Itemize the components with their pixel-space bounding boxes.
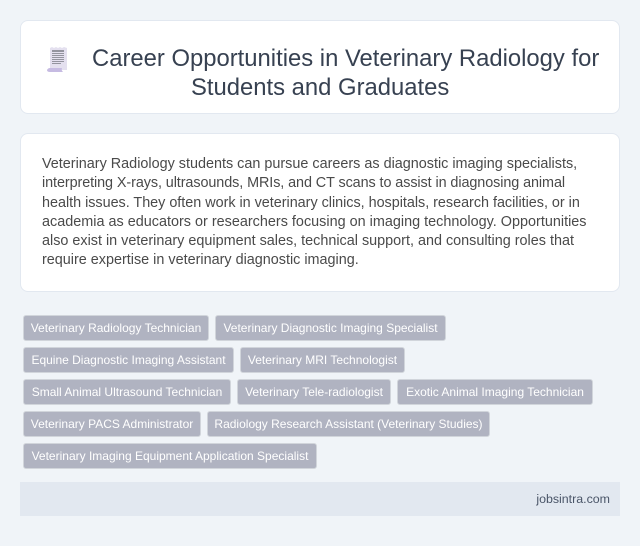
panel: description — [20, 133, 620, 292]
description text: academia as educators or researchers focusing on imaging technology. Opportunities — [42, 214, 587, 230]
tag: Veterinary Tele-radiologist — [245, 385, 383, 399]
tag: Equine Diagnostic Imaging Assistant — [31, 353, 226, 367]
tag list — [23, 315, 593, 469]
description text: require expertise in veterinary diagnostic imaging. — [42, 252, 359, 268]
tag: Exotic Animal Imaging Technician — [406, 385, 584, 399]
tag: Veterinary MRI Technologist — [248, 353, 397, 367]
description text: interpreting X-rays, ultrasounds, MRIs, and CT scans to assist in diagnosing animal — [42, 175, 565, 191]
tag — [240, 347, 405, 373]
tag — [237, 379, 391, 405]
tag — [397, 379, 593, 405]
description text: also exist in veterinary equipment sales, technical support, and consulting roles that — [42, 233, 574, 249]
tag: Small Animal Ultrasound Technician — [32, 385, 222, 399]
tag — [23, 347, 234, 373]
title line 2: Students and Graduates — [191, 74, 449, 101]
tag: Veterinary Imaging Equipment Application Specialist — [32, 449, 308, 463]
tag: Radiology Research Assistant (Veterinary Studies) — [214, 417, 483, 431]
tag — [23, 411, 201, 437]
tag: Veterinary PACS Administrator — [31, 417, 193, 431]
tag: Veterinary Diagnostic Imaging Specialist — [223, 321, 438, 335]
tag — [215, 315, 446, 341]
panel: header — [20, 20, 620, 114]
tag: Veterinary Radiology Technician — [31, 321, 201, 335]
icon: document scroll — [47, 47, 67, 72]
footer source text: jobsintra.com — [536, 492, 610, 506]
tag — [207, 411, 490, 437]
tag — [23, 379, 231, 405]
description text: health issues. They often work in veterinary clinics, hospitals, research facilities, or in — [42, 195, 580, 211]
footer bar — [20, 482, 620, 516]
tag — [23, 315, 209, 341]
tag — [23, 443, 317, 469]
title line 1: Career Opportunities in Veterinary Radiology for — [92, 45, 599, 72]
description text — [42, 156, 587, 268]
description text: Veterinary Radiology students can pursue careers as diagnostic imaging specialists, — [42, 156, 577, 172]
